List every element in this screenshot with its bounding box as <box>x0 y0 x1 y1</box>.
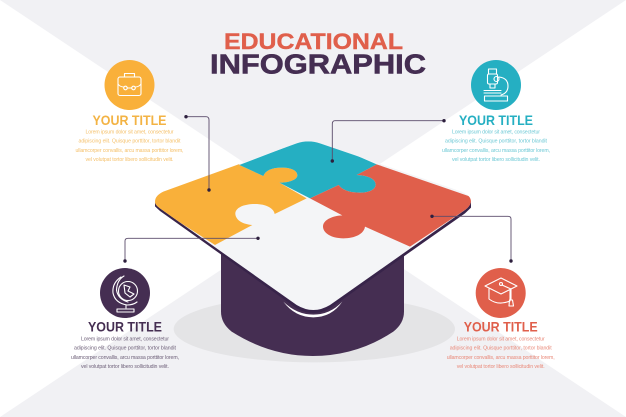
board puzzle <box>155 141 471 310</box>
text block <box>447 336 555 370</box>
text block <box>76 130 184 163</box>
text block: ullamcorper convallis, arcu massa porttitor lorem, <box>442 148 550 154</box>
panel: bottom left <box>71 268 179 370</box>
text block: vel volutpat tortor libero sollicitudin velit. <box>452 157 540 163</box>
connector: yellow <box>184 115 211 192</box>
text block: adipiscing elit. Quisque porttitor, tortor blandit <box>450 346 552 352</box>
puzzle piece: white <box>155 162 471 310</box>
graduation cap <box>155 141 471 362</box>
text block <box>442 130 550 163</box>
heading: YOUR TITLE <box>464 318 538 334</box>
board underside <box>155 202 471 313</box>
heading: YOUR TITLE <box>92 112 166 128</box>
heading: YOUR TITLE <box>88 318 162 334</box>
text block: Lorem ipsum dolor sit amet, consectetur <box>452 130 540 136</box>
text block: adipiscing elit. Quisque porttitor, tortor blandit <box>445 139 548 145</box>
text block <box>71 336 179 370</box>
icon: graduation cap <box>476 268 526 318</box>
icon: globe <box>100 268 150 318</box>
title <box>210 29 426 79</box>
text block: Lorem ipsum dolor sit amet, consectetur <box>457 336 545 342</box>
puzzle piece: teal <box>239 137 377 198</box>
cap body <box>221 250 404 356</box>
heading: infographic: INFOGRAPHIC <box>210 48 426 79</box>
panel: top left <box>76 60 184 163</box>
text block: Lorem ipsum dolor sit amet, consectetur <box>86 130 174 136</box>
text block: ullamcorper convallis, arcu massa porttitor lorem, <box>71 355 179 361</box>
text block: ullamcorper convallis, arcu massa porttitor lorem, <box>447 355 555 361</box>
text block: Lorem ipsum dolor sit amet, consectetur <box>81 336 169 342</box>
text block: ullamcorper convallis, arcu massa porttitor lorem, <box>76 148 184 154</box>
heading: educational: EDUCATIONAL <box>224 29 403 54</box>
puzzle piece: yellow <box>155 164 307 245</box>
text block: adipiscing elit. Quisque porttitor, tortor blandit <box>74 346 177 352</box>
text block: vel volutpat tortor libero sollicitudin velit. <box>86 157 174 163</box>
puzzle piece: red <box>310 164 480 247</box>
connector: red <box>430 215 513 263</box>
icon: microscope <box>471 60 521 110</box>
icon: briefcase <box>104 60 154 110</box>
connector: teal <box>331 119 446 163</box>
text block: vel volutpat tortor libero sollicitudin velit. <box>457 364 545 370</box>
text block: vel volutpat tortor libero sollicitudin velit. <box>81 364 169 370</box>
text block: adipiscing elit. Quisque porttitor, tortor blandit <box>78 139 181 145</box>
cap shadow <box>174 296 455 362</box>
panel: bottom right <box>447 268 555 370</box>
heading: YOUR TITLE <box>459 112 533 128</box>
crescent highlight <box>283 302 342 317</box>
connector: white <box>123 237 260 263</box>
panel: top right <box>442 60 550 163</box>
